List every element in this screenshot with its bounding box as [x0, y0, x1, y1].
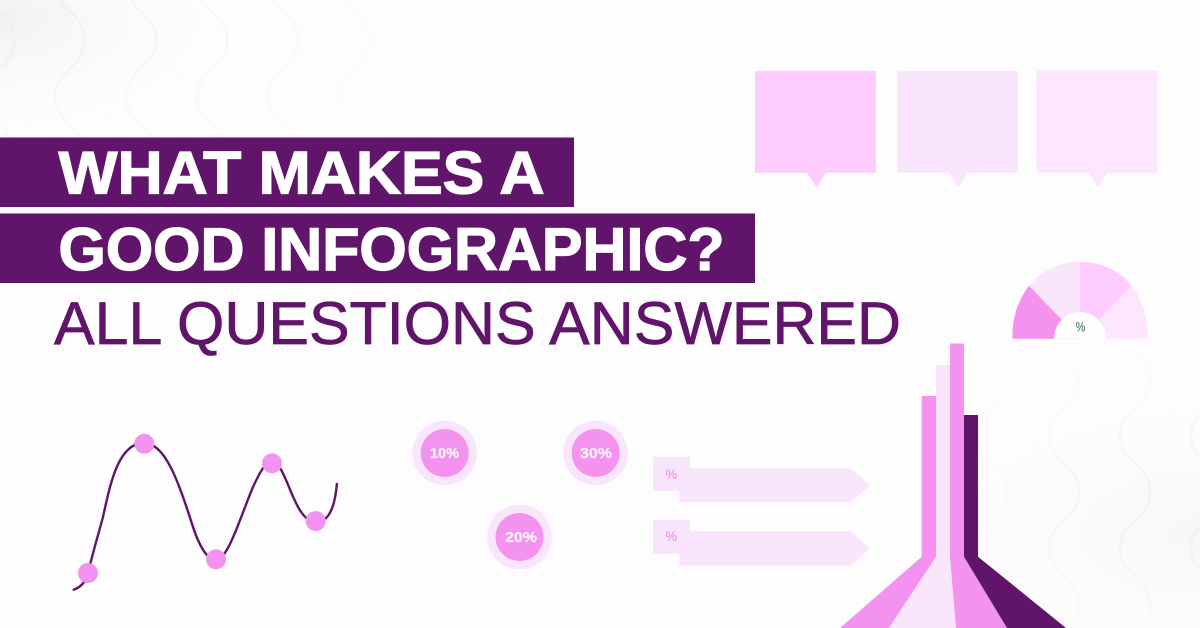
percentage badge: 10% [412, 421, 477, 485]
speech bubble 2 [897, 71, 1018, 187]
bar 4 [964, 415, 1066, 628]
bar 3 [950, 344, 1007, 628]
title banner: line 2 [0, 214, 755, 283]
arrow label 1 [653, 457, 870, 502]
gauge label: % [1076, 320, 1085, 335]
percentage badge: 20%: 20% [505, 529, 537, 546]
heading: what makes a: WHAT MAKES A [58, 140, 544, 207]
line chart [73, 434, 337, 590]
arrow label 2 [653, 520, 870, 566]
percentage badge: 30% [563, 421, 628, 485]
gauge chart [1012, 262, 1148, 339]
speech bubble 1 [755, 71, 876, 187]
percentage badge: 30%: 30% [580, 445, 612, 462]
funnel bar chart [840, 344, 1066, 628]
bar 2 [889, 365, 956, 628]
title block [0, 138, 901, 357]
subheading: all questions answered: ALL QUESTIONS ANSWERED [54, 290, 901, 357]
arrow label 2: % [666, 528, 677, 544]
percentage badge: 20% [487, 505, 552, 569]
arrow label 1: % [666, 466, 677, 482]
speech bubbles [755, 71, 1158, 187]
speech bubble 3 [1037, 71, 1158, 187]
bar 1 [840, 396, 936, 628]
heading: good infographic: GOOD INFOGRAPHIC? [58, 216, 724, 283]
title banner: line 1 [0, 138, 574, 207]
percentage badge: 10%: 10% [430, 445, 459, 462]
